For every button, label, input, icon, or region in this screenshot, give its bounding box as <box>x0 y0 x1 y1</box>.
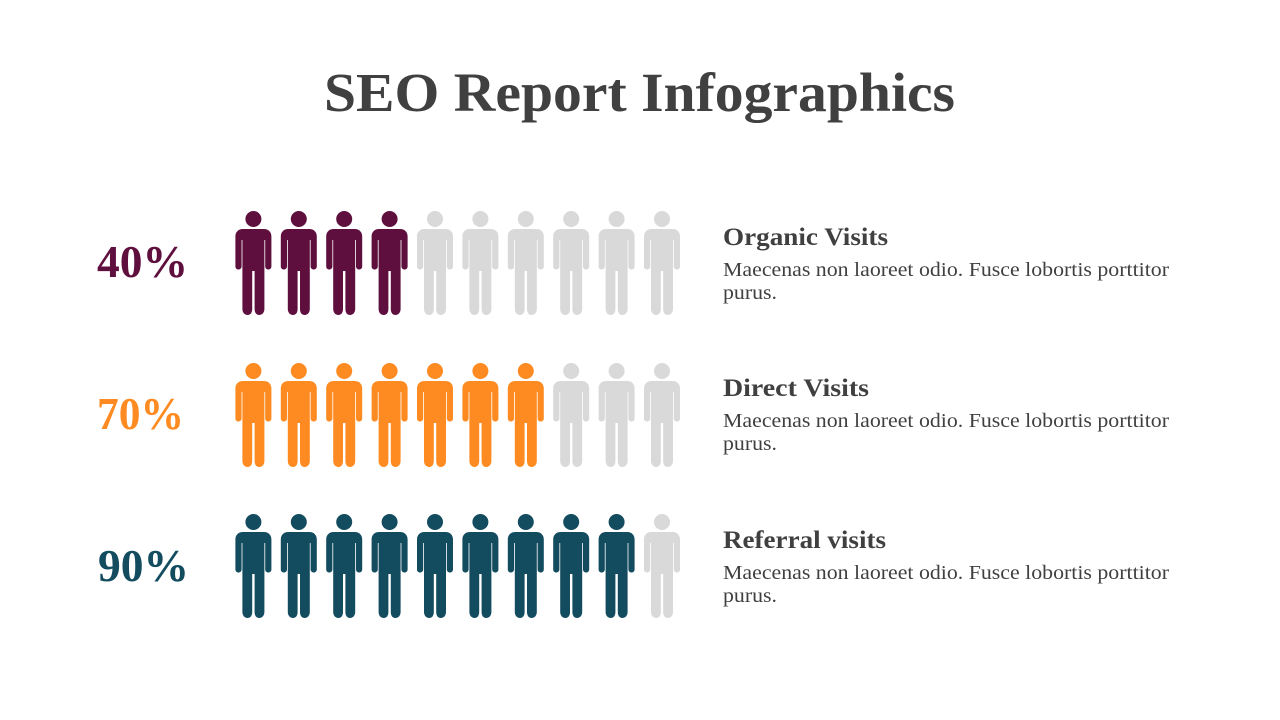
description: direct visits: purus. <box>723 433 777 455</box>
description: referral visits: Maecenas non laoreet odio. Fusce lobortis porttitor <box>723 562 1169 584</box>
label: referral visits: Referral visits <box>723 527 886 554</box>
row: referral visits <box>98 514 1169 618</box>
pictogram: 4 of 10 people <box>235 211 680 315</box>
percentage: 40%: 40% <box>97 236 188 287</box>
description: direct visits <box>723 410 1169 455</box>
description: referral visits: purus. <box>723 585 777 607</box>
pictogram: 9 of 10 people <box>235 514 680 618</box>
description: organic visits <box>723 259 1169 304</box>
description: organic visits: Maecenas non laoreet odio. Fusce lobortis porttitor <box>723 259 1169 281</box>
percentage: 90%: 90% <box>98 540 189 591</box>
percentage: 70%: 70% <box>97 388 184 439</box>
title: SEO Report Infographics <box>324 62 955 123</box>
row: direct visits <box>97 363 1169 467</box>
description: direct visits: Maecenas non laoreet odio. Fusce lobortis porttitor <box>723 410 1169 432</box>
description: referral visits <box>723 562 1169 607</box>
description: organic visits: purus. <box>723 282 777 304</box>
row: organic visits <box>97 211 1169 315</box>
label: organic visits: Organic Visits <box>723 224 888 251</box>
pictogram: 7 of 10 people <box>235 363 680 467</box>
label: direct visits: Direct Visits <box>723 375 869 402</box>
